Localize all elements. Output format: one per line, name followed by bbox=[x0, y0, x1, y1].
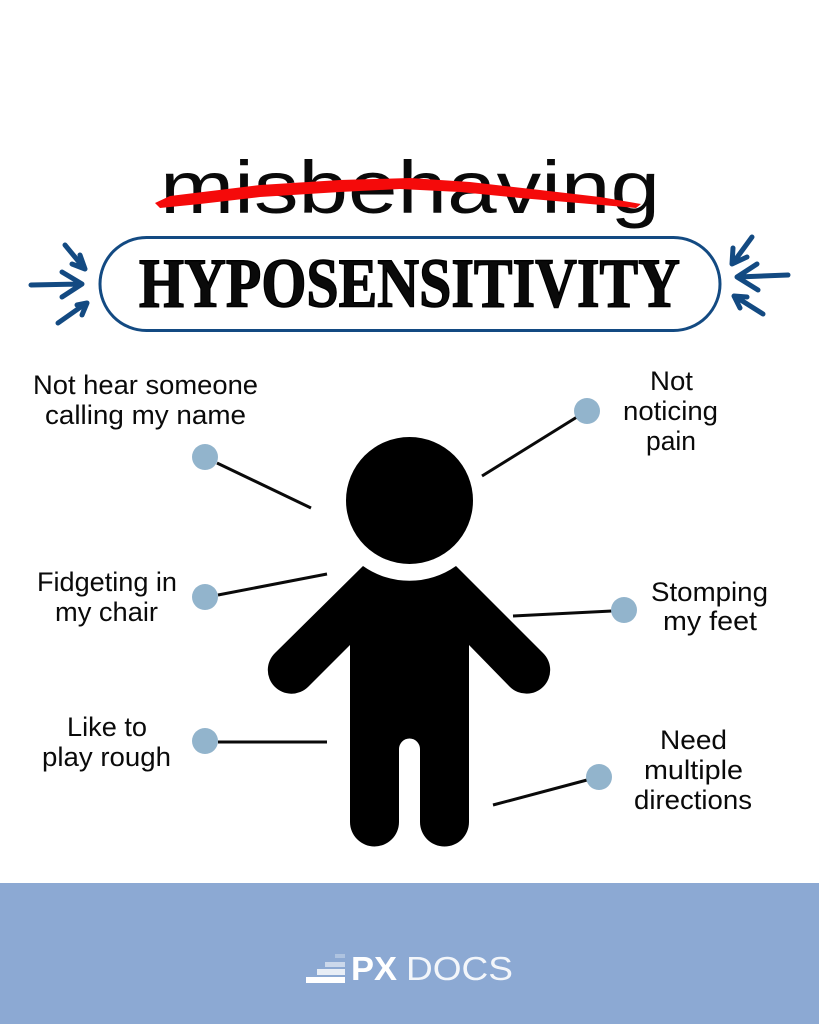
callout: Need multiple directions bbox=[493, 725, 752, 815]
callout: Like to play rough bbox=[42, 712, 327, 772]
icon: logo stairs bbox=[306, 954, 345, 983]
footer logo: PX DOCS bbox=[306, 950, 513, 987]
callout: Not noticing pain bbox=[482, 366, 718, 476]
callout: Stomping my feet bbox=[513, 577, 768, 636]
callout: Fidgeting in my chair: my chair bbox=[55, 597, 158, 627]
icon: arrows pointing in, left bbox=[31, 245, 87, 323]
callout: Like to play rough: Like to bbox=[67, 712, 147, 742]
callout: Fidgeting in my chair: Fidgeting in bbox=[37, 567, 177, 597]
callout: Not noticing pain: noticing bbox=[623, 396, 718, 426]
title pill: HYPOSENSITIVITY: HYPOSENSITIVITY bbox=[139, 246, 680, 322]
callout: Not noticing pain: Not bbox=[650, 366, 693, 396]
callout: Stomping my feet: my feet bbox=[663, 606, 758, 636]
callout: Need multiple directions: Need bbox=[660, 725, 727, 755]
figure body bbox=[268, 566, 550, 846]
callout: Not hear someone calling my name: Not hear someone bbox=[33, 370, 258, 400]
callout: Fidgeting in my chair bbox=[37, 567, 327, 627]
figure: child silhouette bbox=[268, 437, 550, 846]
callout: Not noticing pain: pain bbox=[646, 426, 696, 456]
callout: Need multiple directions: multiple bbox=[644, 755, 743, 785]
callout: Need multiple directions: directions bbox=[634, 785, 752, 815]
crossed-out word: misbehaving: misbehaving bbox=[160, 146, 660, 229]
footer logo: PX DOCS: PX bbox=[351, 950, 397, 987]
footer band bbox=[0, 883, 819, 1024]
icon: arrows pointing in, right bbox=[732, 237, 788, 314]
callout: Not hear someone calling my name bbox=[33, 370, 311, 508]
red strike-through scribble bbox=[155, 178, 641, 208]
footer logo: PX DOCS: DOCS bbox=[406, 950, 513, 987]
callout: Not hear someone calling my name: calling my name bbox=[45, 400, 246, 430]
figure head bbox=[346, 437, 473, 564]
callout: Like to play rough: play rough bbox=[42, 742, 171, 772]
callout: Stomping my feet: Stomping bbox=[651, 577, 768, 607]
